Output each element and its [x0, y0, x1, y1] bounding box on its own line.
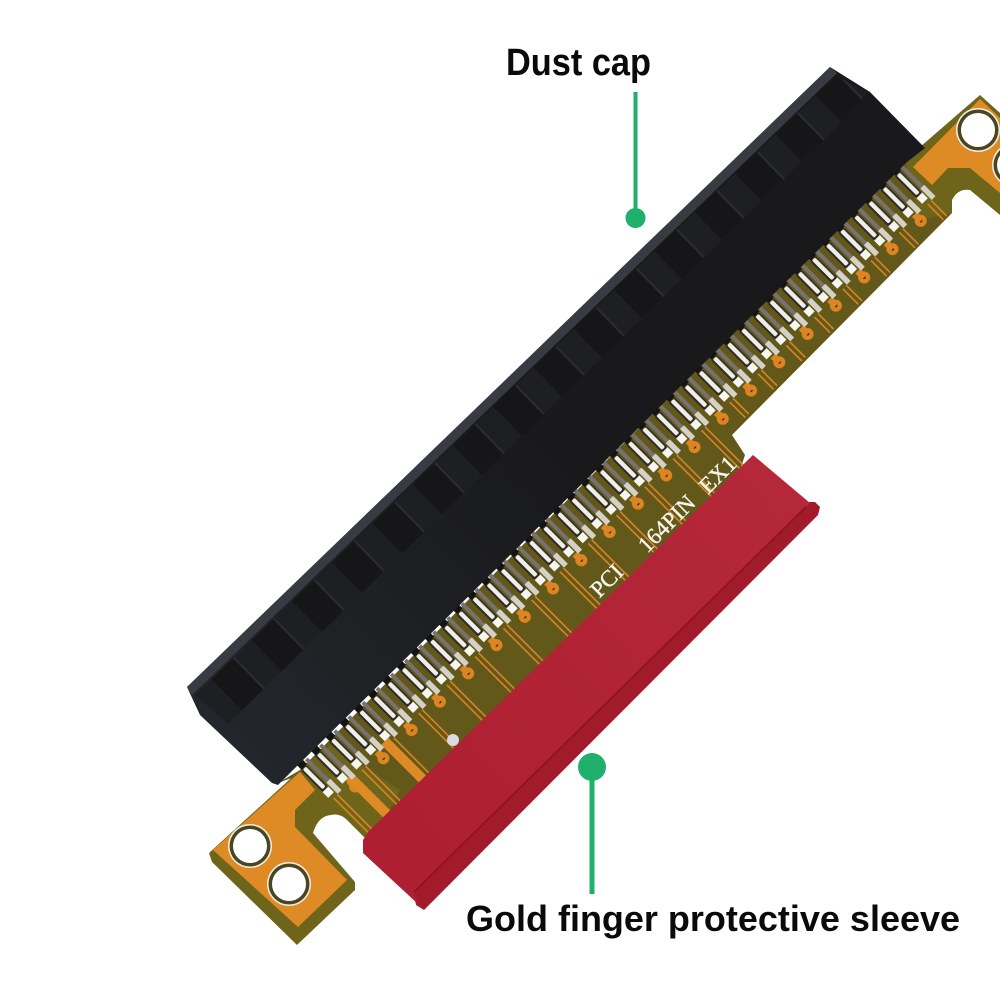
- leader line: [590, 770, 594, 894]
- callout: Dust cap label: [506, 42, 651, 228]
- bottom-left mounting tab: [209, 745, 400, 945]
- sleeve lip: [412, 502, 820, 910]
- dust cap body: [187, 67, 925, 785]
- panel: PCB riser board: [209, 95, 1000, 945]
- dust cap top bevel: [187, 67, 837, 695]
- small board hole: [447, 734, 459, 746]
- callout: Gold finger protective sleeve label: [466, 753, 960, 939]
- board silkscreen label: PCI 164PIN EX1: [585, 451, 741, 602]
- PCB body: [278, 157, 952, 895]
- sleeve face: [363, 455, 810, 904]
- black dust cap connector: [187, 67, 925, 785]
- board silkscreen label: PCI 164PIN EX1: 164PIN: [633, 490, 701, 557]
- heading: Dust cap: Dust cap: [506, 42, 651, 84]
- heading: Gold finger protective sleeve: Gold finger protective sleeve: [466, 898, 960, 939]
- leader line: [634, 92, 638, 216]
- dust cap teeth: [195, 76, 868, 724]
- gold finger pins: [294, 161, 936, 803]
- board silkscreen label: PCI 164PIN EX1: PCI: [585, 559, 628, 602]
- leader dot: [578, 753, 606, 781]
- top-right mounting tab: [905, 95, 1000, 220]
- orange traces: [328, 197, 973, 842]
- red gold finger protective sleeve: [363, 455, 820, 910]
- sleeve groove: [414, 507, 806, 892]
- board silkscreen label: PCI 164PIN EX1: EX1: [694, 451, 741, 498]
- leader dot: [626, 208, 646, 228]
